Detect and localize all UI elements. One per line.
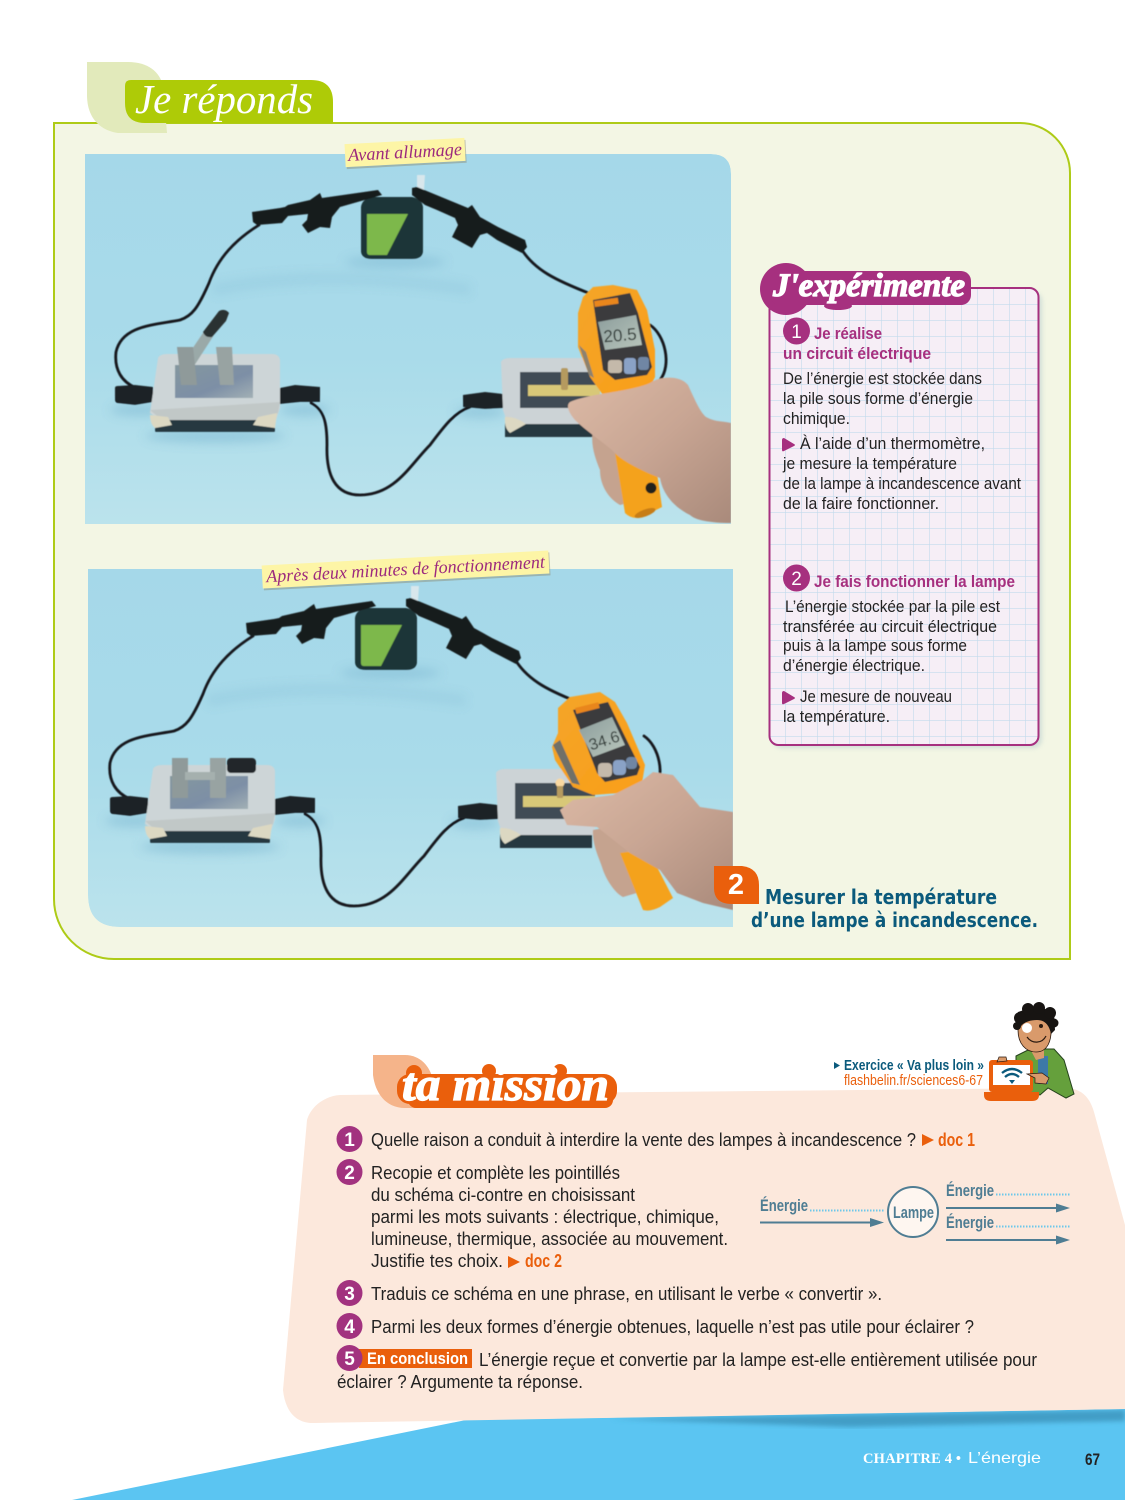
diagram: lamp energy conversion xyxy=(760,1181,1071,1244)
footer: page number: 67 xyxy=(1085,1450,1100,1469)
question 5: en conclusion: L’énergie reçue et convertie par la lampe est-elle entièrement utilisée pour xyxy=(479,1349,1037,1370)
step 1 heading: Je réalise xyxy=(814,324,882,343)
step 2 text: d’énergie électrique. xyxy=(783,656,925,675)
question 1: 1 xyxy=(344,1130,355,1151)
step 1 text: chimique. xyxy=(783,409,850,428)
thermometer handle xyxy=(615,453,662,518)
step 2 text: L’énergie stockée par la pile est xyxy=(785,597,1000,616)
hand fingers behind handle xyxy=(593,825,640,897)
label: Après deux minutes de fonctionnement: Après deux minutes de fonctionnement xyxy=(265,552,546,586)
question 2: 2 xyxy=(344,1163,355,1184)
link: Exercice Va plus loin: flashbelin.fr/sciences6-67 xyxy=(844,1073,983,1089)
diagram: lamp energy conversion: Énergie xyxy=(946,1213,994,1232)
heading: J'expérimente: J'expérimente xyxy=(772,268,965,304)
doc number badge 2 xyxy=(714,866,759,904)
heading: J'expérimente xyxy=(760,263,971,315)
question 4: 4 xyxy=(344,1317,355,1338)
hand and arm xyxy=(568,378,731,523)
step 1 text: je mesure la température xyxy=(782,454,957,473)
question 5: en conclusion: En conclusion xyxy=(367,1350,468,1368)
step 2 text xyxy=(782,597,1000,726)
heading: ta mission: ta mission xyxy=(402,1059,609,1111)
infrared thermometer xyxy=(578,285,655,402)
thermometer handle xyxy=(620,850,673,911)
step 1 heading xyxy=(783,318,931,363)
link: Exercice Va plus loin xyxy=(834,1058,984,1089)
step 2 heading: 2 xyxy=(791,569,802,590)
doc caption: d’une lampe à incandescence. xyxy=(751,908,1038,932)
question 1: doc 1 xyxy=(938,1130,975,1150)
step 2 text: la température. xyxy=(783,707,890,726)
infrared thermometer xyxy=(552,692,645,795)
step 2 heading xyxy=(783,564,1015,592)
question 2: Justifie tes choix. xyxy=(371,1250,503,1271)
doc number badge 2: 2 xyxy=(728,869,744,901)
step 2 heading: Je fais fonctionner la lampe xyxy=(814,572,1015,591)
battery with clips xyxy=(246,586,521,670)
icon: boy with laptop xyxy=(984,1002,1074,1101)
electric wires xyxy=(116,225,666,495)
step 1 text: de la faire fonctionner. xyxy=(783,494,939,513)
question 5: en conclusion: 5 xyxy=(344,1349,355,1370)
heading: Je réponds tab xyxy=(87,62,333,133)
panel: ta mission background xyxy=(283,1088,1125,1423)
switch module closed xyxy=(110,758,315,843)
lamp module lit xyxy=(458,769,595,848)
footer: chapter title: L’énergie xyxy=(968,1450,1041,1467)
panel: Je réponds background xyxy=(54,123,1070,959)
step 1 text: de la lampe à incandescence avant xyxy=(783,474,1021,493)
panel: J'expérimente xyxy=(760,263,1042,748)
link: Exercice Va plus loin: Exercice « Va plus loin » xyxy=(844,1058,984,1074)
hand fingers behind handle xyxy=(591,434,624,506)
step 1 heading: 1 xyxy=(791,322,802,343)
diagram: lamp energy conversion: Énergie xyxy=(760,1196,808,1215)
doc caption: Mesurer la température xyxy=(765,885,997,909)
question 1: Quelle raison a conduit à interdire la vente des lampes à incandescence ? xyxy=(371,1129,916,1150)
question 2 xyxy=(336,1159,728,1271)
step 1 text: la pile sous forme d’énergie xyxy=(783,389,973,408)
question 2: du schéma ci-contre en choisissant xyxy=(371,1184,635,1205)
hand and arm xyxy=(560,772,733,910)
question 2: doc 2 xyxy=(525,1251,562,1271)
shadows of the circuit xyxy=(110,256,505,443)
electric wires xyxy=(110,636,660,906)
lamp module xyxy=(463,358,600,437)
question 2: parmi les mots suivants : électrique, chimique, xyxy=(371,1206,719,1227)
question 2: Recopie et complète les pointillés xyxy=(371,1162,620,1183)
diagram: lamp energy conversion: Énergie xyxy=(946,1181,994,1200)
doc caption xyxy=(751,885,1038,932)
photo: circuit avant allumage xyxy=(85,154,731,524)
infrared thermometer: 34.6 xyxy=(587,728,622,754)
footer: blue band xyxy=(72,1409,1125,1500)
photo: circuit après deux minutes xyxy=(88,569,733,927)
step 2 text: transférée au circuit électrique xyxy=(783,617,997,636)
question 5: en conclusion: éclairer ? Argumente ta réponse. xyxy=(337,1371,583,1392)
footer: chapter title xyxy=(863,1450,1041,1467)
step 2 text: puis à la lampe sous forme xyxy=(783,636,967,655)
question 5: en conclusion xyxy=(336,1345,1037,1392)
shadows of the circuit xyxy=(105,667,500,854)
step 1 text: De l’énergie est stockée dans xyxy=(783,369,982,388)
infrared thermometer: 20.5 xyxy=(603,325,637,346)
question 3: Traduis ce schéma en une phrase, en utilisant le verbe « convertir ». xyxy=(371,1283,882,1304)
footer: chapter title: CHAPITRE 4 • xyxy=(863,1451,961,1467)
battery with clips xyxy=(252,175,527,259)
heading: Je réponds tab: Je réponds xyxy=(135,76,313,122)
question 4: Parmi les deux formes d’énergie obtenues, laquelle n’est pas utile pour éclairer ? xyxy=(371,1316,974,1337)
step 2 text: Je mesure de nouveau xyxy=(800,687,952,706)
question 2: lumineuse, thermique, associée au mouvement. xyxy=(371,1228,728,1249)
step 1 text xyxy=(782,369,1021,513)
label: Avant allumage: Avant allumage xyxy=(347,139,462,165)
step 1 text: À l’aide d’un thermomètre, xyxy=(800,434,985,453)
diagram: lamp energy conversion: Lampe xyxy=(893,1203,934,1222)
switch module open xyxy=(115,310,320,432)
step 1 heading: un circuit électrique xyxy=(783,344,931,363)
question 3: 3 xyxy=(344,1284,355,1305)
